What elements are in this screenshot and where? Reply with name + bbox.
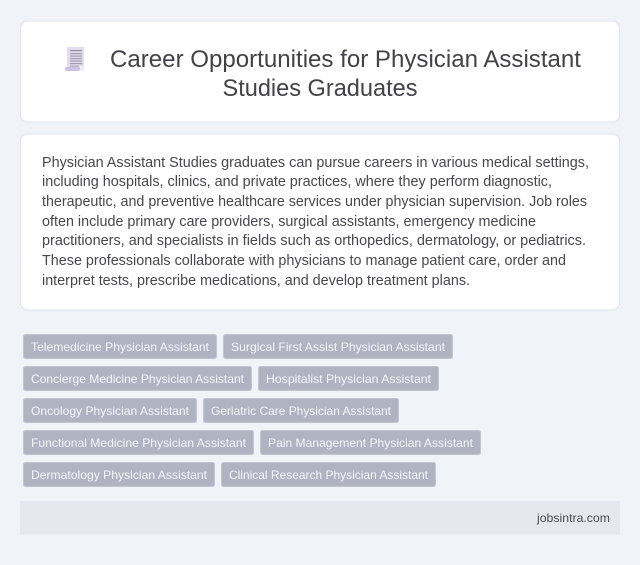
tag: Concierge Medicine: Concierge Medicine Physician Assistant (31, 372, 245, 386)
text block: description: including hospitals, clinics, and private practices, where they perform diagnostic, (42, 174, 552, 190)
tag: Hospitalist: Hospitalist Physician Assistant (266, 372, 432, 386)
text block: description: practitioners, and specialists in fields such as orthopedics, dermatology, or pediatrics. (42, 233, 586, 249)
title: Studies Graduates (222, 75, 418, 102)
text block: description: Physician Assistant Studies graduates can pursue careers in various medical settings, (42, 155, 589, 171)
tag list: career roles (24, 334, 480, 486)
tag: Functional Medicine (24, 430, 254, 454)
tag: Functional Medicine: Functional Medicine Physician Assistant (31, 436, 247, 450)
tag: Oncology (24, 398, 196, 422)
title (110, 46, 581, 102)
tag: Geriatric Care: Geriatric Care Physician Assistant (211, 404, 392, 418)
text block: description: These professionals collaborate with physicians to manage patient care, order and (42, 253, 566, 269)
tag: Oncology: Oncology Physician Assistant (31, 404, 190, 418)
tag: Dermatology (24, 462, 214, 486)
icon: document scroll (65, 47, 84, 71)
panel: header (20, 21, 620, 122)
tag: Dermatology: Dermatology Physician Assistant (31, 468, 208, 482)
tag: Pain Management: Pain Management Physician Assistant (268, 436, 474, 450)
panel: description (20, 134, 620, 310)
tag: Geriatric Care (204, 398, 398, 422)
tag: Clinical Research (222, 462, 436, 486)
text block: description: therapeutic, and preventive healthcare services under physician supervision. Job roles (42, 194, 587, 210)
text block: description: interpret tests, prescribe medications, and develop treatment plans. (42, 273, 470, 289)
tag: Hospitalist (258, 366, 438, 390)
tag: Surgical First Assist (224, 334, 452, 358)
tag: Concierge Medicine (24, 366, 252, 390)
footer text: source: jobsintra.com (536, 511, 610, 525)
tag: Telemedicine (24, 334, 216, 358)
tag: Clinical Research: Clinical Research Physician Assistant (229, 468, 429, 482)
tag: Surgical First Assist: Surgical First Assist Physician Assistant (231, 340, 446, 354)
title: Career Opportunities for Physician Assistant (110, 46, 581, 73)
text block: description: often include primary care providers, surgical assistants, emergency medicine (42, 214, 536, 230)
tag: Pain Management (260, 430, 480, 454)
footer (20, 501, 620, 534)
text block: description (42, 155, 589, 289)
tag: Telemedicine: Telemedicine Physician Assistant (31, 340, 210, 354)
